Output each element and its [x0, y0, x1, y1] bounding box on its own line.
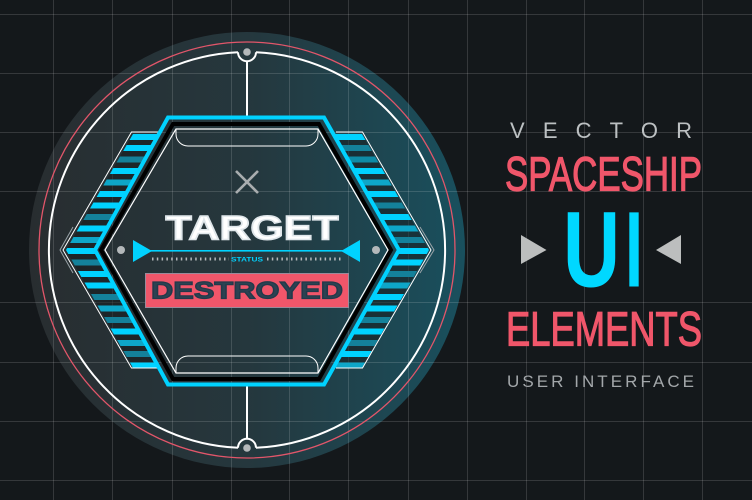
connector node: top — [243, 48, 251, 56]
arrow: left of UI — [521, 235, 546, 264]
outer cyan hexagon — [95, 118, 399, 384]
title: VECTOR: VECTOR — [510, 118, 692, 143]
destroyed badge: DESTROYED — [151, 278, 343, 304]
destroyed badge — [146, 274, 348, 308]
white ring with connectors — [49, 52, 445, 448]
dotted line left — [152, 258, 229, 260]
dotted line right — [267, 258, 342, 260]
right striped wing — [336, 132, 434, 368]
thin white hexagon with end caps — [105, 129, 388, 373]
connector node: bottom — [243, 444, 251, 452]
title: UI: I — [625, 188, 643, 310]
label: STATUS: STATUS — [231, 256, 264, 264]
subtitle: USER INTERFACE: USER INTERFACE — [507, 372, 694, 391]
background disc — [29, 32, 465, 468]
left striped wing — [60, 132, 158, 368]
black hexagon — [101, 124, 391, 379]
cyan arrow line — [133, 240, 360, 262]
node: right — [372, 246, 380, 254]
node: left — [117, 246, 125, 254]
arrow: right of UI — [656, 235, 681, 264]
heading: TARGET: TARGET — [166, 210, 339, 248]
icon: close X — [236, 171, 258, 193]
title: UI: U — [563, 188, 620, 310]
red outer ring — [39, 42, 455, 458]
